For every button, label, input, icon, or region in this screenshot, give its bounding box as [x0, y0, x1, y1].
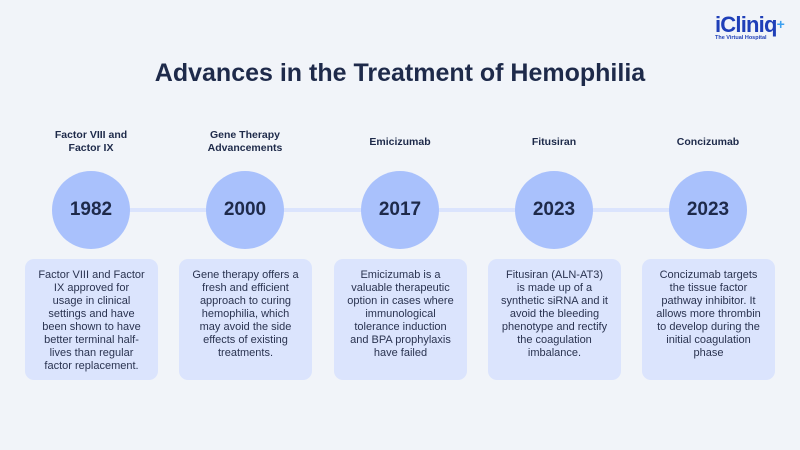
description boxes: Gene therapy offers a fresh and efficient approach to curing hemophilia, which may avoid the side effects of existing treatments.	[192, 269, 299, 359]
headings: Gene Therapy	[210, 129, 280, 141]
headings: Fitusiran	[532, 136, 576, 148]
headings: Factor VIII and	[55, 129, 127, 141]
year circles	[52, 171, 747, 249]
headings: Emicizumab	[369, 136, 431, 148]
year circles: 2017	[379, 199, 421, 220]
year circles: 2000	[224, 199, 266, 220]
year circles: 2023	[533, 199, 575, 220]
headings: Concizumab	[677, 136, 739, 148]
headings	[55, 129, 739, 154]
description boxes: Concizumab targets the tissue factor pathway inhibitor. It allows more thrombin to develop during the initial coagulation phase	[656, 269, 761, 359]
year circles: 2023	[687, 199, 729, 220]
title: Advances in the Treatment of Hemophilia	[155, 59, 645, 87]
timeline connector	[91, 208, 708, 212]
headings: Advancements	[208, 142, 282, 154]
headings: Factor IX	[69, 142, 113, 154]
description boxes	[25, 259, 775, 380]
logo: iCliniq+	[715, 12, 784, 37]
description boxes: Factor VIII and Factor IX approved for usage in clinical settings and have been shown to have better terminal half-lives than regular factor replacement.	[38, 269, 145, 372]
description boxes: Emicizumab is a valuable therapeutic option in cases where immunological tolerance induction and BPA prophylaxis have failed	[347, 269, 454, 359]
description boxes: Fitusiran (ALN-AT3) is made up of a synthetic siRNA and it avoid the bleeding phenotype and rectify the coagulation imbalance.	[501, 269, 608, 359]
logo: The Virtual Hospital	[715, 35, 767, 41]
year circles: 1982	[70, 199, 112, 220]
